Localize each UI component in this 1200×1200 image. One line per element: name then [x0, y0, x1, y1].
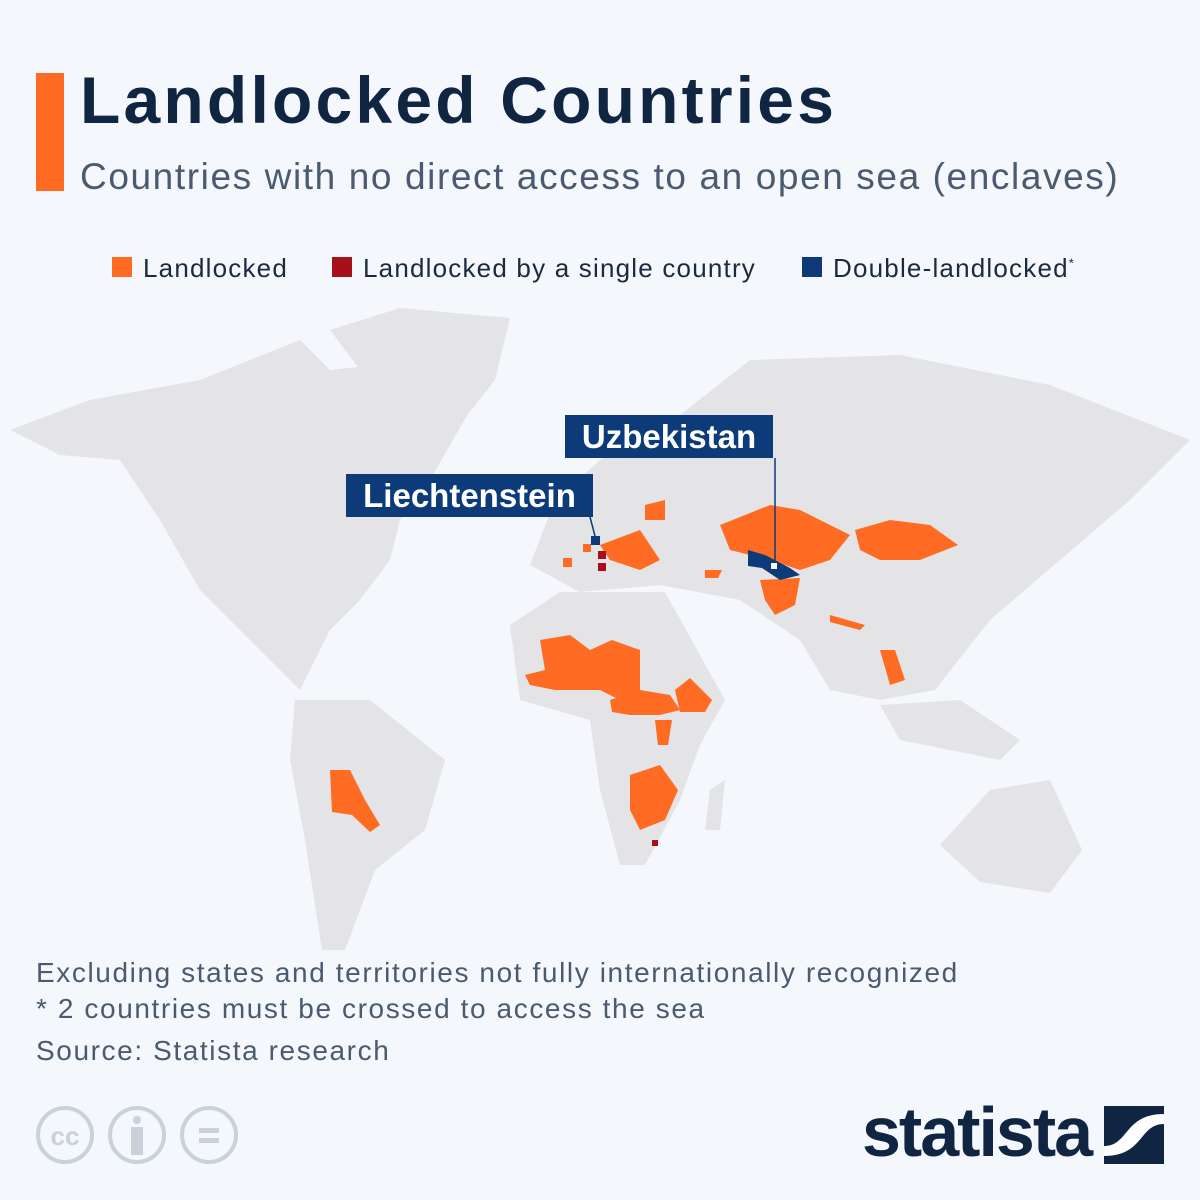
notes: Excluding states and territories not fully internationally recognized [36, 957, 959, 988]
callout: Liechtenstein: Liechtenstein [363, 477, 576, 514]
callout: Uzbekistan: Uzbekistan [582, 418, 756, 455]
landlocked countries [330, 500, 958, 832]
legend: landlocked: Landlocked [143, 253, 288, 283]
notes: Source: Statista research [36, 1035, 390, 1066]
notes: * 2 countries must be crossed to access the sea [36, 993, 706, 1024]
cc icons [36, 1106, 238, 1164]
subtitle: Countries with no direct access to an open sea (enclaves) [80, 156, 1119, 197]
statista logo: statista [862, 1093, 1091, 1171]
legend: single country: Landlocked by a single country [363, 253, 756, 283]
cc icons: cc [51, 1121, 79, 1151]
notes [36, 957, 959, 1066]
accent bar [36, 73, 64, 191]
legend [112, 253, 1075, 283]
title: Landlocked Countries [80, 63, 837, 137]
continents [10, 340, 470, 690]
legend: double: Double-landlocked* [833, 253, 1075, 283]
